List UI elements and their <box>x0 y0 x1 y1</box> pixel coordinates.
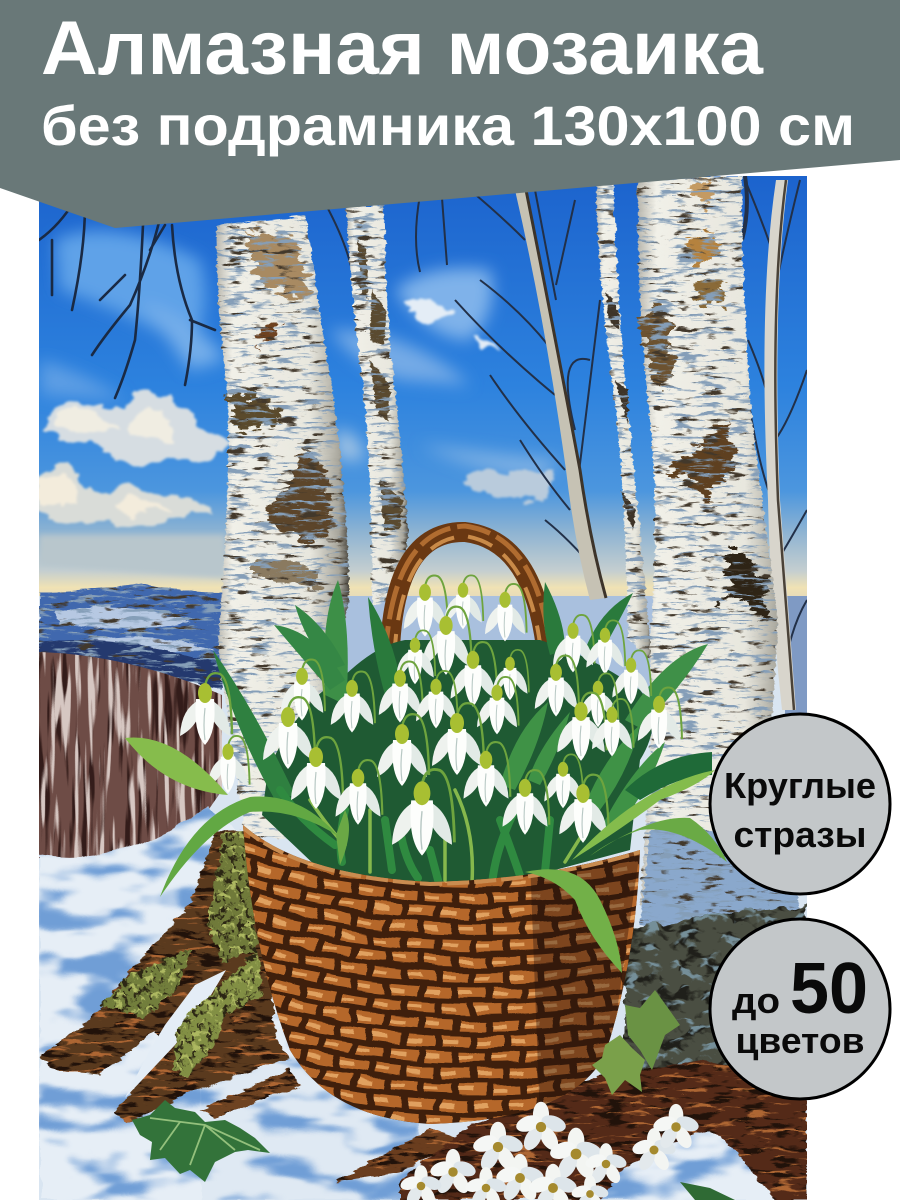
bare winter forest <box>39 652 222 866</box>
title line 1: Алмазная мозаика <box>41 6 764 91</box>
foliage behind the flowers <box>262 640 652 890</box>
stems and lower foliage <box>280 790 585 885</box>
thin bare trees and branches <box>326 176 807 650</box>
snow <box>39 805 807 1200</box>
small white flowers in the snow <box>399 1102 701 1200</box>
bark scars on the left trunk <box>228 231 334 586</box>
back leaves <box>213 580 712 830</box>
badge: round rhinestones: стразы <box>734 814 866 855</box>
leaves beside the basket <box>592 990 735 1200</box>
thin birch far right <box>764 180 796 710</box>
birch trunk large left <box>216 216 349 840</box>
cumulus clouds <box>39 299 555 524</box>
dark mossy ground on the right <box>625 905 807 1085</box>
wicker basket <box>243 825 640 1124</box>
banner with title <box>0 0 900 228</box>
snowdrop flowers <box>180 575 682 856</box>
badge: up to 50 colours: цветов <box>736 1020 864 1061</box>
snow wedge between the roots <box>125 970 226 1098</box>
snow between the roots and basket <box>200 1060 420 1200</box>
badge: round rhinestones: Круглые <box>724 765 876 806</box>
sky <box>39 176 807 596</box>
large foreground leaves <box>125 737 727 973</box>
thin birch centre-right <box>515 190 606 600</box>
birch trunk slim right <box>596 182 652 660</box>
badge: round rhinestones <box>710 714 890 894</box>
bark scars on the right trunk <box>636 180 770 625</box>
fallen green leaf <box>132 1100 270 1182</box>
pale horizon band <box>39 535 225 578</box>
base snow colour under the landscape <box>39 596 807 1200</box>
title line 2: без подрамника 130х100 см <box>41 94 855 157</box>
brown ground on the right <box>400 1060 807 1200</box>
high wispy clouds <box>40 231 560 480</box>
badge: up to 50 colours: 50 <box>790 949 868 1029</box>
snowy hills behind basket <box>345 596 807 714</box>
distant mountains <box>39 583 222 690</box>
birch trunk slim centre-left <box>346 206 408 605</box>
basket handle <box>382 522 547 644</box>
birch trunk large right <box>636 176 805 935</box>
badge: up to 50 colours: до <box>732 980 780 1021</box>
badge: up to 50 colours <box>710 919 890 1099</box>
moss on the trunk base and roots <box>100 832 262 1078</box>
tree roots <box>39 830 460 1182</box>
hanging branches top left <box>39 200 215 398</box>
panel: painting of snowdrops in a basket among birches <box>39 176 807 1200</box>
